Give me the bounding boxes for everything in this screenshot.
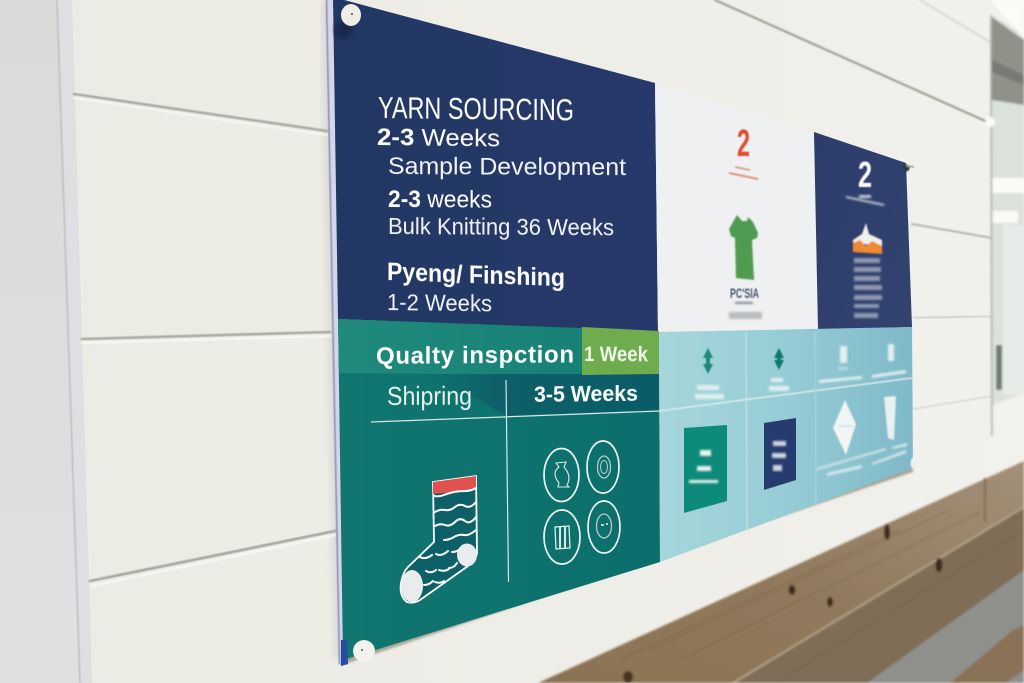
icon: white diamond — [833, 400, 856, 455]
wall panel seams — [74, 0, 992, 586]
panel: teal timeline — [338, 319, 660, 660]
icon: vase — [544, 448, 579, 502]
icon: white cup — [884, 396, 896, 440]
numeral: white 2: 2 — [858, 154, 872, 195]
pin: bottom right — [910, 457, 918, 469]
poster — [326, 0, 918, 666]
icon: orange layered cap — [853, 223, 882, 254]
numeral: red 2: 2 — [737, 123, 750, 165]
text: quality inspection: Qualty inspction — [376, 341, 574, 370]
text: shipping: Shipring — [387, 381, 472, 411]
window at right — [985, 0, 1024, 436]
heading: yarn sourcing: YARN SOURCING — [378, 90, 574, 127]
panel: navy detail column — [814, 132, 912, 330]
small red caption — [729, 167, 758, 179]
panel: light blue grid — [659, 327, 913, 562]
grid lines — [371, 380, 659, 582]
icon: green arrows — [703, 348, 713, 374]
text: shipping duration: 3-5 Weeks — [534, 381, 638, 407]
wooden wainscot and floor — [538, 461, 1024, 683]
icon: teal arrows — [774, 348, 784, 370]
icon: sock — [401, 476, 477, 603]
white caption — [846, 195, 884, 206]
text: brand label: PC'SIA — [730, 285, 759, 301]
text: dyeing duration: 1-2 Weeks — [387, 289, 492, 316]
small grey caption — [729, 302, 762, 319]
pins — [334, 4, 918, 666]
panel: navy timeline — [333, 0, 658, 332]
shipping strip — [410, 374, 659, 416]
card: green — [684, 425, 727, 513]
green highlight — [582, 327, 659, 375]
text: sample development: Sample Development — [388, 153, 626, 181]
pin: bottom left — [341, 640, 375, 666]
icon: dial — [588, 501, 620, 553]
icon: pale figures — [819, 344, 906, 383]
card: navy — [764, 418, 796, 490]
panel: white product column — [655, 84, 818, 333]
pin: top left — [334, 4, 361, 39]
text: yarn sourcing duration: 2-3 Weeks — [377, 124, 500, 152]
text: inspection duration: 1 Week — [584, 343, 648, 366]
text: sample duration: 2-3 weeks — [388, 186, 492, 214]
small white captions, lower right — [817, 443, 907, 476]
poster shadow and sheet edge — [326, 0, 913, 666]
list rows — [854, 258, 882, 318]
left column — [0, 0, 92, 683]
pin: top right — [902, 164, 914, 172]
grid lines — [659, 331, 912, 530]
poster cast shadow on wall — [322, 0, 342, 660]
icon: green garment — [729, 215, 758, 280]
text: bulk knitting: Bulk Knitting 36 Weeks — [388, 213, 614, 240]
small white captions — [695, 378, 789, 399]
icon: ring — [587, 441, 619, 493]
icon: panels — [544, 510, 580, 564]
text: dyeing finishing: Pyeng/ Finshing — [387, 258, 565, 292]
icon group: four circles — [544, 441, 620, 564]
